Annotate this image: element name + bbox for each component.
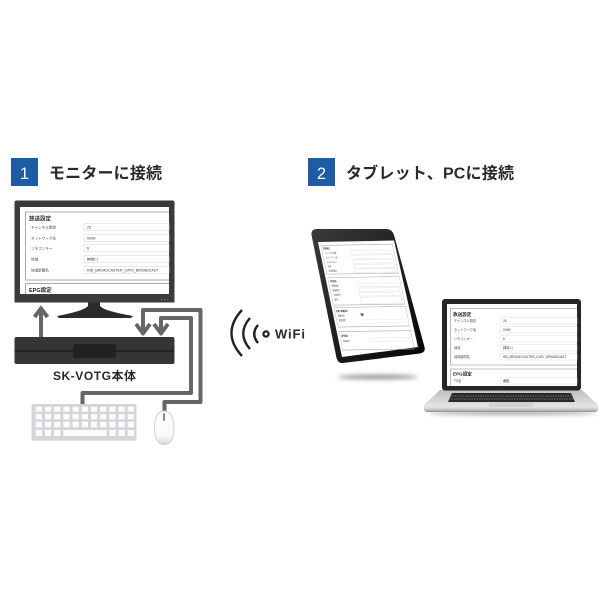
icon: keyboard: [32, 404, 136, 441]
tablet: [311, 229, 425, 380]
laptop screen: 放送設定: [453, 311, 472, 318]
tablet screen: 住所設定: [329, 279, 338, 283]
main unit box: [14, 337, 174, 364]
arrow: box to monitor: [34, 308, 48, 338]
icon: mouse: [154, 411, 174, 444]
monitor screen: チャンネル設定: [31, 224, 56, 230]
tablet screen: 放送設定: [323, 246, 331, 251]
monitor screen: 地域新聞名: [31, 268, 49, 272]
unit label: SK-VOTG本体: [53, 368, 136, 383]
laptop screen: TS名: [454, 378, 461, 383]
tablet screen: チャンネル設定: [324, 250, 338, 255]
laptop shadow: [428, 411, 596, 415]
number badge 2: 2: [317, 165, 326, 183]
wifi label: WiFi: [275, 326, 305, 342]
monitor screen: 0X0K: [87, 236, 96, 240]
tablet screen: 都道府県: [332, 288, 340, 293]
laptop screen: 26: [503, 319, 507, 323]
monitor screen: 地域: [31, 256, 39, 262]
monitor screen: RID_BROADCASTER_CATV_BROADCAST: [87, 268, 159, 272]
tablet screen: 起動方法: [337, 313, 346, 318]
laptop screen: RID_BROADCASTER_CATV_BROADCAST: [503, 355, 566, 359]
tablet screen: ネットワーク名: [325, 255, 338, 260]
monitor screen: 神奈川: [87, 256, 98, 262]
cable and arrow: mouse to box: [136, 310, 200, 412]
laptop front edge: [424, 406, 598, 412]
laptop base: [424, 390, 598, 407]
heading text 1: モニターに接続: [49, 164, 162, 182]
tablet screen: 地域: [327, 264, 332, 268]
tablet shadow: [338, 374, 418, 380]
laptop screen: リモコンキー: [454, 337, 473, 341]
laptop lid: [442, 299, 581, 390]
laptop screen: EPG設定: [453, 371, 472, 378]
laptop screen: 地域: [454, 345, 461, 350]
laptop screen: 0X0K: [503, 328, 512, 332]
tablet screen: 番組表示: [343, 338, 351, 343]
laptop: [424, 299, 598, 415]
laptop screen: [447, 304, 577, 386]
laptop trackpad: [489, 402, 533, 407]
cable and arrow: keyboard to box: [82, 318, 191, 404]
monitor screen: ネットワーク名: [31, 236, 57, 240]
number badge 1: [11, 158, 38, 186]
laptop screen: チャンネル設定: [454, 318, 477, 323]
tablet screen: 起動 / 節電設定: [336, 308, 349, 313]
tablet screen: リモコンキー: [327, 261, 337, 264]
monitor screen: 26: [87, 226, 91, 230]
laptop screen: 神奈川: [503, 345, 513, 350]
tablet body: [311, 229, 425, 363]
tablet screen: [318, 240, 418, 357]
monitor stand: [57, 301, 133, 318]
number badge 1: 1: [20, 165, 29, 183]
tablet screen: 節電設定: [338, 318, 347, 322]
monitor screen: [14, 207, 174, 302]
tablet screen: 市区町村: [333, 292, 341, 297]
tablet screen: 地域新聞名: [328, 268, 337, 273]
laptop screen: 地域新聞名: [454, 354, 470, 359]
monitor screen: 放送設定: [29, 215, 52, 223]
heading 2: [308, 158, 514, 186]
tablet screen: 番号設定: [341, 333, 349, 338]
laptop screen: 番組: [503, 378, 510, 383]
heading text 2: タブレット、PCに接続: [346, 164, 514, 182]
number badge 2: [308, 158, 335, 186]
monitor bezel: [14, 200, 174, 302]
monitor screen: 6: [87, 246, 89, 250]
monitor: [14, 200, 174, 318]
icon: wifi: [232, 310, 269, 356]
monitor screen: EPG設定: [29, 287, 52, 294]
tablet screen: 郵便番号: [331, 283, 339, 288]
laptop keyboard: [448, 393, 575, 402]
laptop screen: ネットワーク名: [454, 327, 476, 332]
heading 1: [11, 158, 162, 186]
laptop screen: 6: [503, 337, 505, 341]
monitor buttons: [161, 299, 168, 300]
tablet screen: 番地: [334, 297, 339, 302]
monitor screen: リモコンキー: [31, 246, 53, 250]
